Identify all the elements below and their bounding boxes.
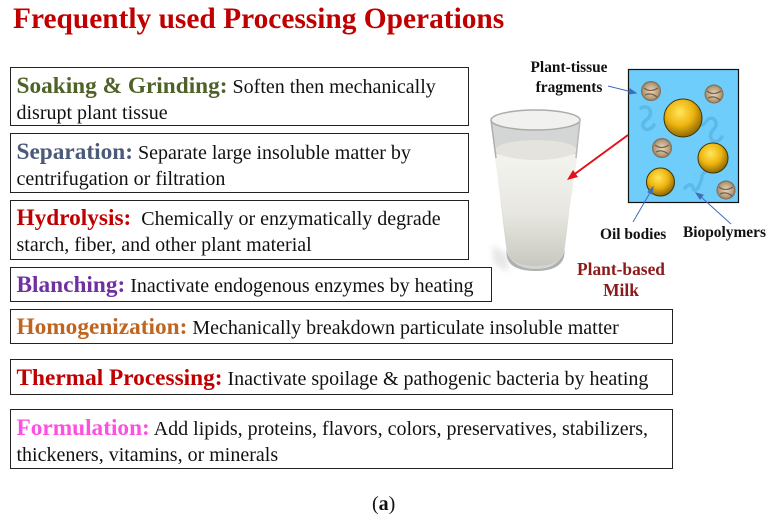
panel: thermal processing: Thermal Processing: Inactivate spoilage & pathogenic bacteria by heating — [16, 365, 648, 391]
panel: blanching: Blanching: Inactivate endogenous enzymes by heating — [16, 272, 473, 298]
label: biopolymers: Biopolymers — [683, 224, 766, 241]
caption: (a) — [372, 493, 395, 515]
panel: formulation — [10, 409, 673, 469]
panel: composition diagram — [628, 70, 738, 202]
panel: soaking and grinding: disrupt plant tissue — [16, 102, 168, 124]
label: plant-tissue fragments: Plant-tissue — [531, 59, 607, 76]
panel: homogenization: Homogenization: Mechanically breakdown particulate insoluble matter — [16, 314, 619, 340]
arrow: red arrow to glass — [567, 135, 628, 180]
label: plant-based milk — [577, 259, 665, 300]
panel: separation: centrifugation or filtration — [16, 168, 225, 190]
label: plant-tissue fragments: fragments — [536, 79, 602, 96]
panel: separation: Separation: Separate large insoluble matter by — [16, 139, 411, 165]
label: plant-based milk: Milk — [603, 280, 639, 300]
plant tissue fragments — [641, 81, 736, 200]
panel: hydrolysis — [10, 200, 469, 260]
label: plant-tissue fragments — [530, 59, 608, 96]
panel: homogenization — [10, 309, 673, 344]
panel: hydrolysis: Hydrolysis: Chemically or enzymatically degrade — [16, 205, 441, 231]
panel: soaking and grinding — [10, 67, 469, 126]
illustration: glass of milk and composition diagram — [490, 68, 740, 271]
panel: separation — [10, 133, 469, 193]
panel: thermal processing — [10, 359, 673, 395]
label: plant-based milk: Plant-based — [577, 259, 665, 279]
panel: formulation: thickeners, vitamins, or minerals — [16, 444, 278, 466]
biopolymers — [641, 107, 722, 190]
panel: hydrolysis: starch, fiber, and other plant material — [16, 234, 312, 256]
label: oil bodies: Oil bodies — [600, 226, 666, 243]
panel: soaking and grinding: Soaking & Grinding: Soften then mechanically — [16, 73, 436, 99]
icon: glass of milk — [491, 110, 580, 272]
panel: formulation: Formulation: Add lipids, proteins, flavors, colors, preservatives, stabilizers, — [16, 415, 648, 441]
oil bodies — [646, 99, 728, 196]
title: Frequently used Processing Operations — [13, 3, 504, 35]
arrows: blue callout arrows — [608, 86, 731, 224]
